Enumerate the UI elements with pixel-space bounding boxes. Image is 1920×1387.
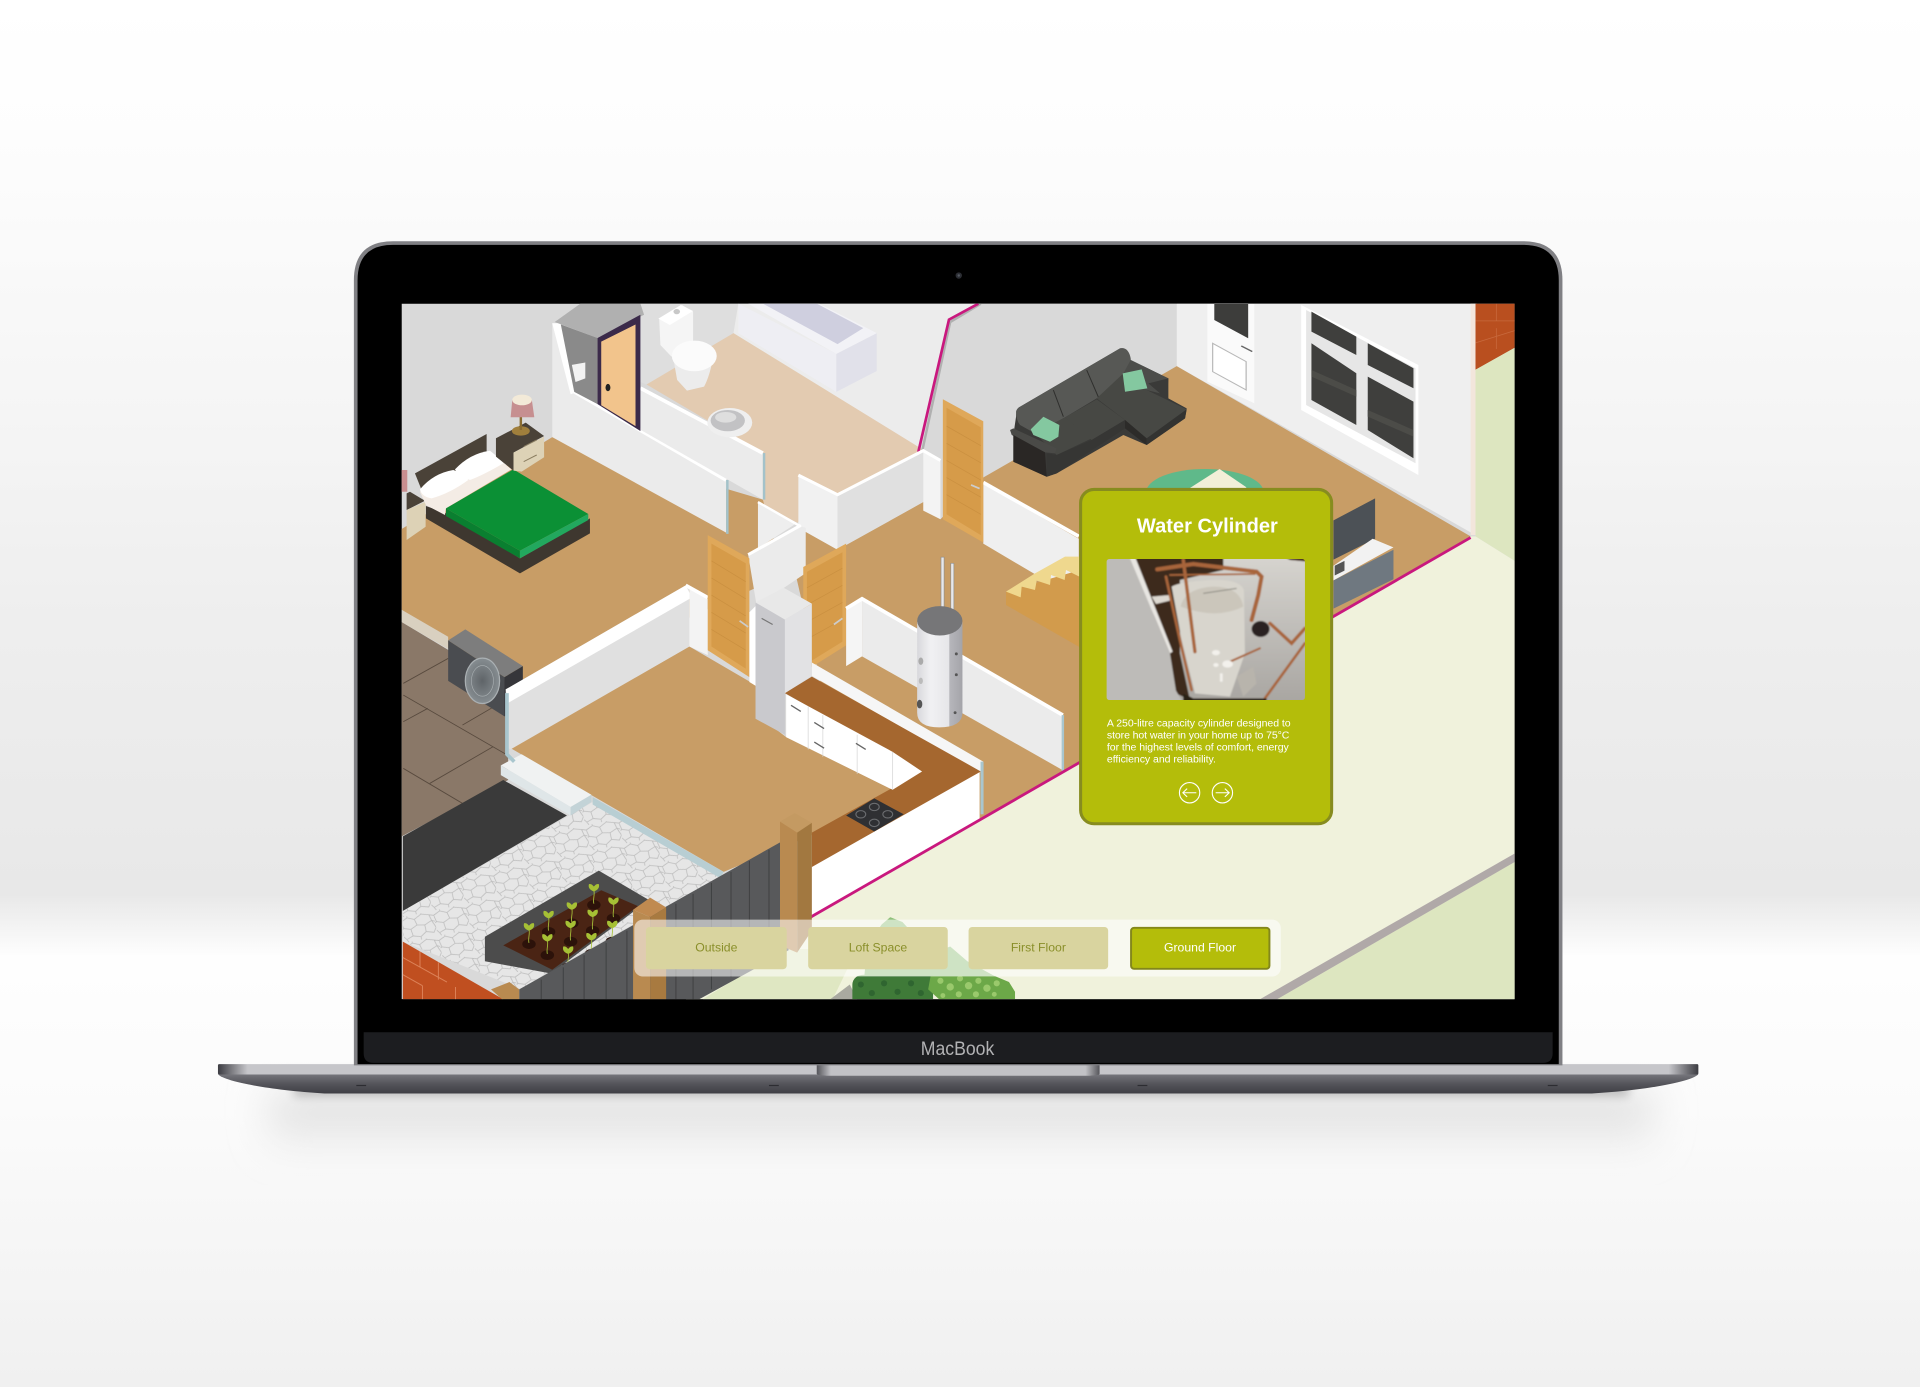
floor selector bar [634,920,1281,977]
card description: for the highest levels of comfort, energy [1107,741,1290,753]
pink boundary line lower [811,538,1471,917]
headboard [415,434,487,490]
living room back wall [980,304,1177,305]
pillow right [455,451,503,480]
bedroom floor [402,437,784,698]
card description: A 250-litre capacity cylinder designed to [1107,718,1291,730]
info card: Water Cylinder [1081,489,1332,824]
window [1301,305,1418,475]
next arrow [1212,783,1233,803]
wall edge strip [1471,304,1477,535]
base top surface [218,1064,1698,1075]
button: Outside [646,927,787,969]
airing cupboard with door [555,304,644,431]
fence post left [491,982,519,999]
sofa cushion right [1123,369,1147,392]
bed sheet [420,460,512,515]
MacBook label: MacBook [921,1039,995,1060]
planter [485,871,649,973]
path strip [1260,853,1515,999]
patio [402,610,508,836]
water cylinder [917,557,962,727]
kitchen outer wall [812,662,983,917]
fence post centre [633,898,666,999]
rug [1147,469,1263,488]
fence [519,838,789,999]
wall strip by fridge [749,606,756,686]
vents [356,1085,1558,1086]
laptop lid [354,241,1562,1065]
door: hall [803,544,846,672]
dark driveway [403,780,567,911]
bed base [426,506,590,573]
sofa fronts [1047,420,1125,477]
kitchen floor [511,647,893,872]
bed [402,434,590,573]
camera [956,272,962,279]
button: Ground Floor: Ground Floor [1164,940,1236,954]
laptop base [218,1064,1698,1093]
grey paving corner [830,985,857,999]
front ground [686,536,1515,999]
floor edge [593,797,724,878]
heat pump [448,629,523,716]
sofa [1010,348,1187,477]
left nightstand [402,470,426,540]
sofa backrest [1016,348,1131,433]
patio step [501,754,591,816]
base lower body [218,1074,1698,1093]
brick upper right [1476,304,1515,370]
sofa arm [1010,428,1057,453]
card title: Water Cylinder [1137,516,1278,538]
cylinder body [917,622,962,727]
television and stand [1333,498,1393,609]
sofa seats [1035,417,1092,455]
door: living room [943,399,983,542]
sofa silhouette [1013,348,1187,477]
side lawn [1476,348,1515,561]
card description: store hot water in your home up to 75°C [1107,729,1290,741]
wall: cylinder room [846,599,1063,771]
kitchen cabinets [786,694,922,790]
screen: isometric floor plan [402,304,1515,1000]
right nightstand and lamp [496,395,544,472]
pillow left [420,470,468,498]
cylinder photo [1103,557,1308,703]
card description [1107,718,1291,765]
button: Loft Space: Loft Space [849,940,907,954]
kitchen worktop [785,677,981,867]
sofa cushion left [1031,417,1059,442]
fridge [756,588,812,735]
bathroom side wall [733,304,980,452]
door: bedroom [708,535,749,677]
button: First Floor [969,927,1108,969]
cylinder pipes [941,557,954,622]
bathroom partition [640,388,764,500]
wall: main bedroom [552,323,727,534]
stairs [1006,557,1080,647]
fence post right [780,813,812,953]
bush [845,912,1022,1000]
cobblestones [403,802,720,989]
button: Outside: Outside [695,940,738,954]
hall and living floor [796,366,1471,819]
sink [707,408,752,437]
bathroom back wall [640,304,738,305]
brick lower left [403,942,503,999]
wall: hallway stub [748,502,806,606]
toilet [658,305,717,391]
wall: bathroom outer [798,451,940,550]
button: Ground Floor [1131,928,1269,969]
lawn lower centre [703,949,857,999]
wall: kitchen [506,585,708,762]
sprouts [522,884,620,972]
laptop shadow [269,1085,1653,1155]
button: Loft Space [808,927,948,969]
card description: efficiency and reliability. [1107,753,1216,765]
hob [846,798,904,831]
lawn lower right [1277,862,1515,999]
button: First Floor: First Floor [1011,940,1066,954]
previous arrow [1179,783,1200,803]
front door [1207,304,1254,403]
pink boundary line upper [918,304,981,452]
base notch [817,1064,1100,1076]
bottom strip [364,1032,1553,1063]
green duvet [446,469,588,551]
living room front wall [1177,304,1476,535]
cylinder fittings [917,652,958,714]
bathroom floor [647,333,924,523]
wall: living room [983,480,1080,579]
bathtub [738,304,877,392]
